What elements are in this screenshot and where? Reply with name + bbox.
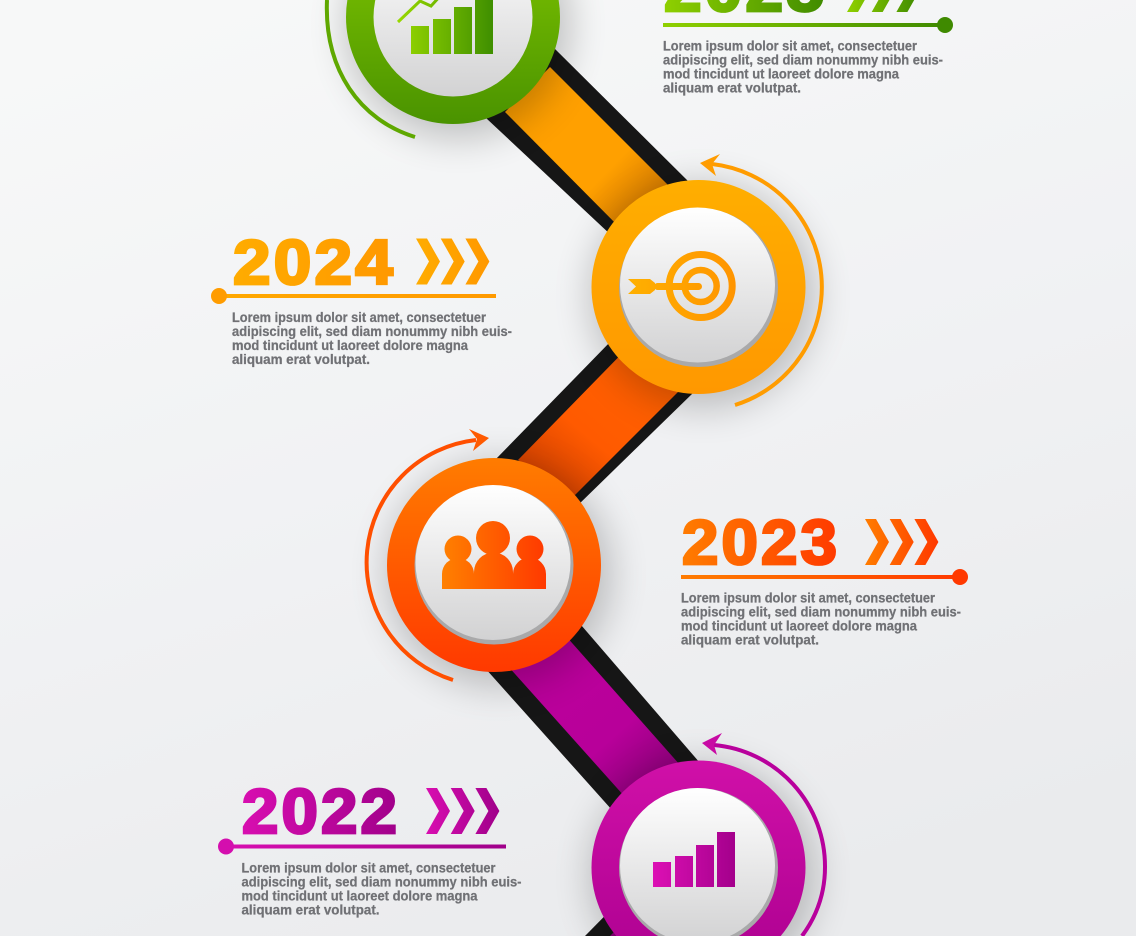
description: mod tincidunt ut laoreet dolore magna bbox=[242, 888, 478, 904]
description: aliquam erat volutpat. bbox=[242, 902, 380, 918]
description: Lorem ipsum dolor sit amet, consectetuer bbox=[663, 38, 918, 54]
description: aliquam erat volutpat. bbox=[232, 352, 370, 367]
block: 2024 bbox=[211, 228, 512, 367]
connector line bbox=[211, 288, 496, 304]
arc with arrow bbox=[327, 0, 415, 137]
description bbox=[681, 590, 961, 648]
arc with arrow bbox=[700, 154, 822, 405]
chevrons bbox=[416, 238, 489, 284]
description: Lorem ipsum dolor sit amet, consectetuer bbox=[681, 590, 936, 606]
chevrons bbox=[426, 788, 499, 834]
description: adipiscing elit, sed diam nonummy nibh euis- bbox=[663, 52, 943, 68]
year heading: 2024 bbox=[233, 228, 396, 298]
description: Lorem ipsum dolor sit amet, consectetuer bbox=[242, 860, 496, 876]
description: mod tincidunt ut laoreet dolore magna bbox=[663, 66, 900, 82]
description: adipiscing elit, sed diam nonummy nibh euis- bbox=[681, 604, 961, 620]
milestone 2025 node bbox=[327, 0, 570, 138]
connector line bbox=[681, 569, 968, 585]
description: Lorem ipsum dolor sit amet, consectetuer bbox=[232, 310, 487, 325]
description: mod tincidunt ut laoreet dolore magna bbox=[681, 618, 918, 634]
chevrons bbox=[865, 519, 938, 565]
description: aliquam erat volutpat. bbox=[681, 632, 819, 648]
icon: target and arrow bbox=[628, 254, 732, 318]
milestone 2024 node bbox=[591, 154, 822, 408]
arc with arrow bbox=[367, 429, 489, 680]
connector line bbox=[218, 838, 506, 854]
icon: growth chart bbox=[398, 0, 493, 54]
description: mod tincidunt ut laoreet dolore magna bbox=[232, 338, 469, 353]
block: 2022 bbox=[218, 777, 522, 918]
block: 2023 bbox=[681, 508, 968, 648]
milestone 2022 node bbox=[591, 733, 825, 936]
description: adipiscing elit, sed diam nonummy nibh euis- bbox=[242, 874, 522, 890]
chevrons bbox=[847, 0, 920, 12]
block: 2025 bbox=[663, 0, 953, 96]
timeline ribbon: orange to red bbox=[495, 335, 693, 508]
timeline ribbon: red to magenta bbox=[485, 618, 700, 810]
description bbox=[663, 38, 943, 96]
description: adipiscing elit, sed diam nonummy nibh euis- bbox=[232, 324, 512, 339]
timeline ribbon: below magenta bbox=[585, 870, 720, 936]
description: aliquam erat volutpat. bbox=[663, 80, 801, 96]
year heading: 2022 bbox=[242, 777, 400, 847]
milestone 2023 node bbox=[367, 429, 611, 686]
year heading: 2023 bbox=[682, 508, 840, 578]
timeline ribbon: green to orange bbox=[486, 47, 700, 238]
icon: bar chart bbox=[653, 832, 735, 887]
description bbox=[232, 310, 512, 367]
description bbox=[242, 860, 522, 918]
arc with arrow bbox=[702, 733, 825, 936]
icon: people bbox=[442, 521, 546, 589]
connector line bbox=[663, 17, 953, 33]
